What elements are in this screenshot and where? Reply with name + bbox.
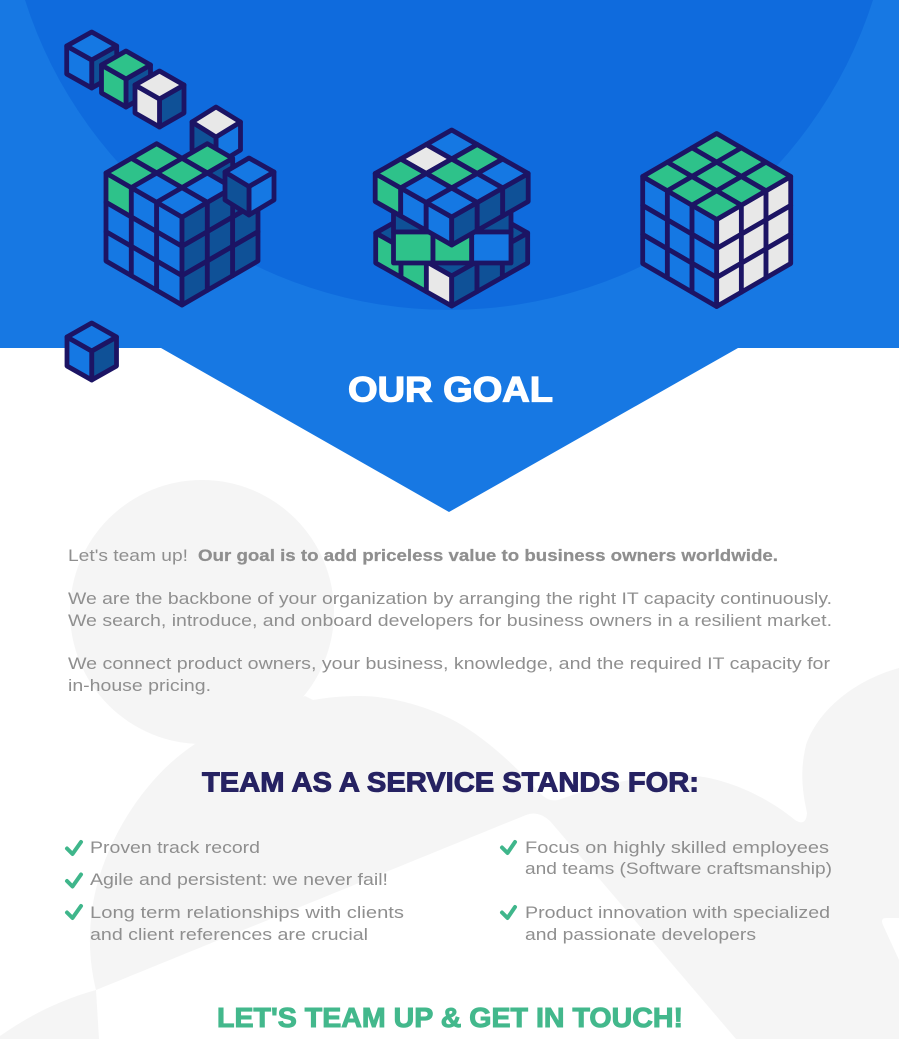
intro text block: Let's team up!	[68, 546, 188, 565]
icon: check	[502, 842, 515, 853]
intro text block: We search, introduce, and onboard developers for business owners in a resilient market.	[68, 611, 832, 630]
icon: lone cube at banner edge	[67, 323, 116, 380]
icon: cube displaced to right of left cube	[225, 158, 274, 215]
list item: Agile and persistent: we never fail!	[90, 870, 388, 889]
intro text block	[68, 546, 832, 695]
list item: Long term relationships with clients	[90, 903, 404, 922]
list item: Product innovation with specialized	[525, 903, 830, 922]
list item	[525, 903, 830, 944]
intro text block: Our goal is to add priceless value to business owners worldwide.	[198, 546, 778, 565]
list item: and client references are crucial	[90, 925, 368, 944]
background: faint people silhouettes	[0, 480, 899, 1039]
header banner	[0, 0, 899, 512]
icon: cube lifted out of left cube, white top	[192, 107, 240, 165]
icon: floating small green cube	[102, 51, 150, 107]
title: OUR GOAL	[348, 370, 553, 410]
intro text block: in-house pricing.	[68, 676, 211, 695]
checklist: right column	[502, 838, 832, 944]
intro text block: We connect product owners, your business, knowledge, and the required IT capacity for	[68, 654, 830, 673]
icon: check	[502, 907, 515, 918]
list item: and passionate developers	[525, 925, 756, 944]
icon: left unsolved cube	[106, 129, 258, 305]
icon: check	[67, 842, 81, 854]
list item: and teams (Software craftsmanship)	[525, 859, 832, 878]
icon: right solved cube	[643, 134, 791, 306]
list item: Focus on highly skilled employees	[525, 838, 829, 857]
checklist: left column	[67, 838, 404, 944]
list item: Proven track record	[90, 838, 260, 857]
icon: check	[67, 874, 81, 886]
icon: floating small blue cube	[67, 32, 117, 88]
icon: middle twisted cube	[375, 130, 528, 306]
icon: check	[67, 906, 81, 918]
intro text block: We are the backbone of your organization by arranging the right IT capacity continuously.	[68, 589, 832, 608]
list item	[525, 838, 832, 878]
call to action: LET'S TEAM UP & GET IN TOUCH!	[217, 1002, 683, 1033]
heading: team as a service: TEAM AS A SERVICE STANDS FOR:	[202, 766, 699, 798]
icon: floating small white cube	[135, 71, 184, 127]
list item	[90, 903, 404, 944]
